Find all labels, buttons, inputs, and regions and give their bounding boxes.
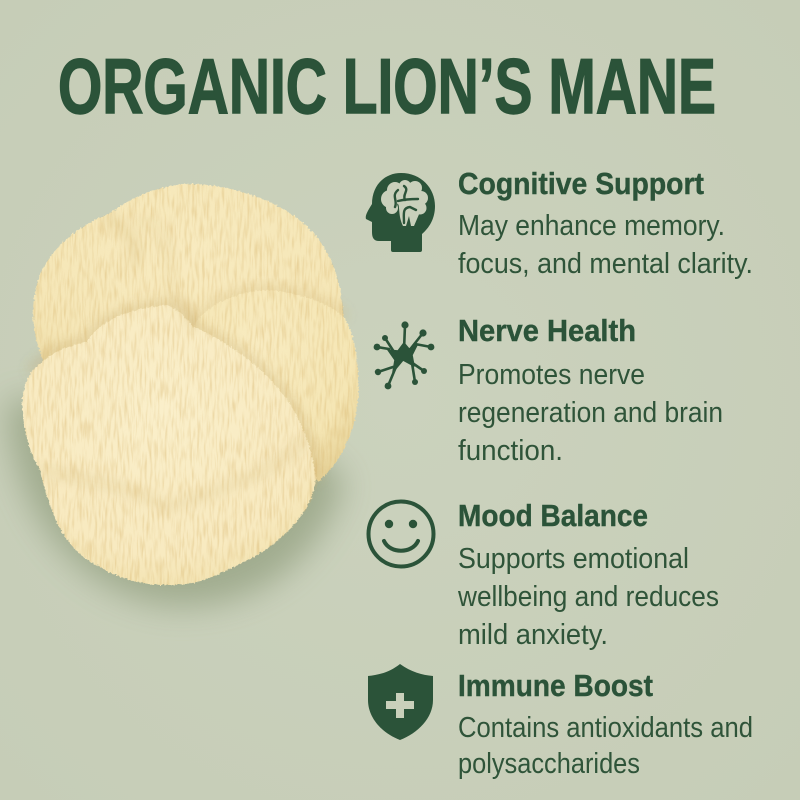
heading: Nerve Health xyxy=(458,313,636,348)
mushroom fur texture xyxy=(15,175,365,595)
description: function. xyxy=(458,435,563,467)
icon: smiling face xyxy=(368,502,434,566)
description xyxy=(458,210,753,280)
benefit: nerve health xyxy=(458,313,723,467)
description xyxy=(458,359,723,467)
brain xyxy=(381,180,428,226)
front lobe xyxy=(22,305,316,585)
mushroom shadow xyxy=(8,400,345,606)
right lobe shade on back xyxy=(193,290,345,327)
description: Promotes nerve xyxy=(458,359,645,391)
icon: neuron xyxy=(374,321,434,389)
right lobe xyxy=(193,290,358,482)
description: regeneration and brain xyxy=(458,397,723,429)
description: May enhance memory. xyxy=(458,210,725,242)
description: wellbeing and reduces xyxy=(457,581,719,613)
benefit: immune boost xyxy=(458,668,753,780)
description xyxy=(458,712,753,780)
description xyxy=(457,543,719,651)
benefit: mood balance xyxy=(457,498,719,651)
heading: Immune Boost xyxy=(458,668,653,703)
mushroom illustration xyxy=(8,175,365,606)
description: polysaccharides xyxy=(458,748,640,780)
heading: Mood Balance xyxy=(458,498,648,533)
mushroom creases xyxy=(42,218,305,508)
description: Supports emotional xyxy=(458,543,689,575)
heading: Cognitive Support xyxy=(458,166,704,201)
description: Contains antioxidants and xyxy=(458,712,753,744)
back lobe xyxy=(33,184,344,420)
benefit: cognitive support xyxy=(458,166,753,280)
lower fold xyxy=(42,440,305,508)
description: focus, and mental clarity. xyxy=(458,248,753,280)
description: mild anxiety. xyxy=(458,619,608,651)
icon: head with brain xyxy=(366,173,435,252)
mushroom body xyxy=(22,184,358,585)
icon: shield with plus xyxy=(368,664,433,740)
front lobe shade xyxy=(30,305,316,480)
